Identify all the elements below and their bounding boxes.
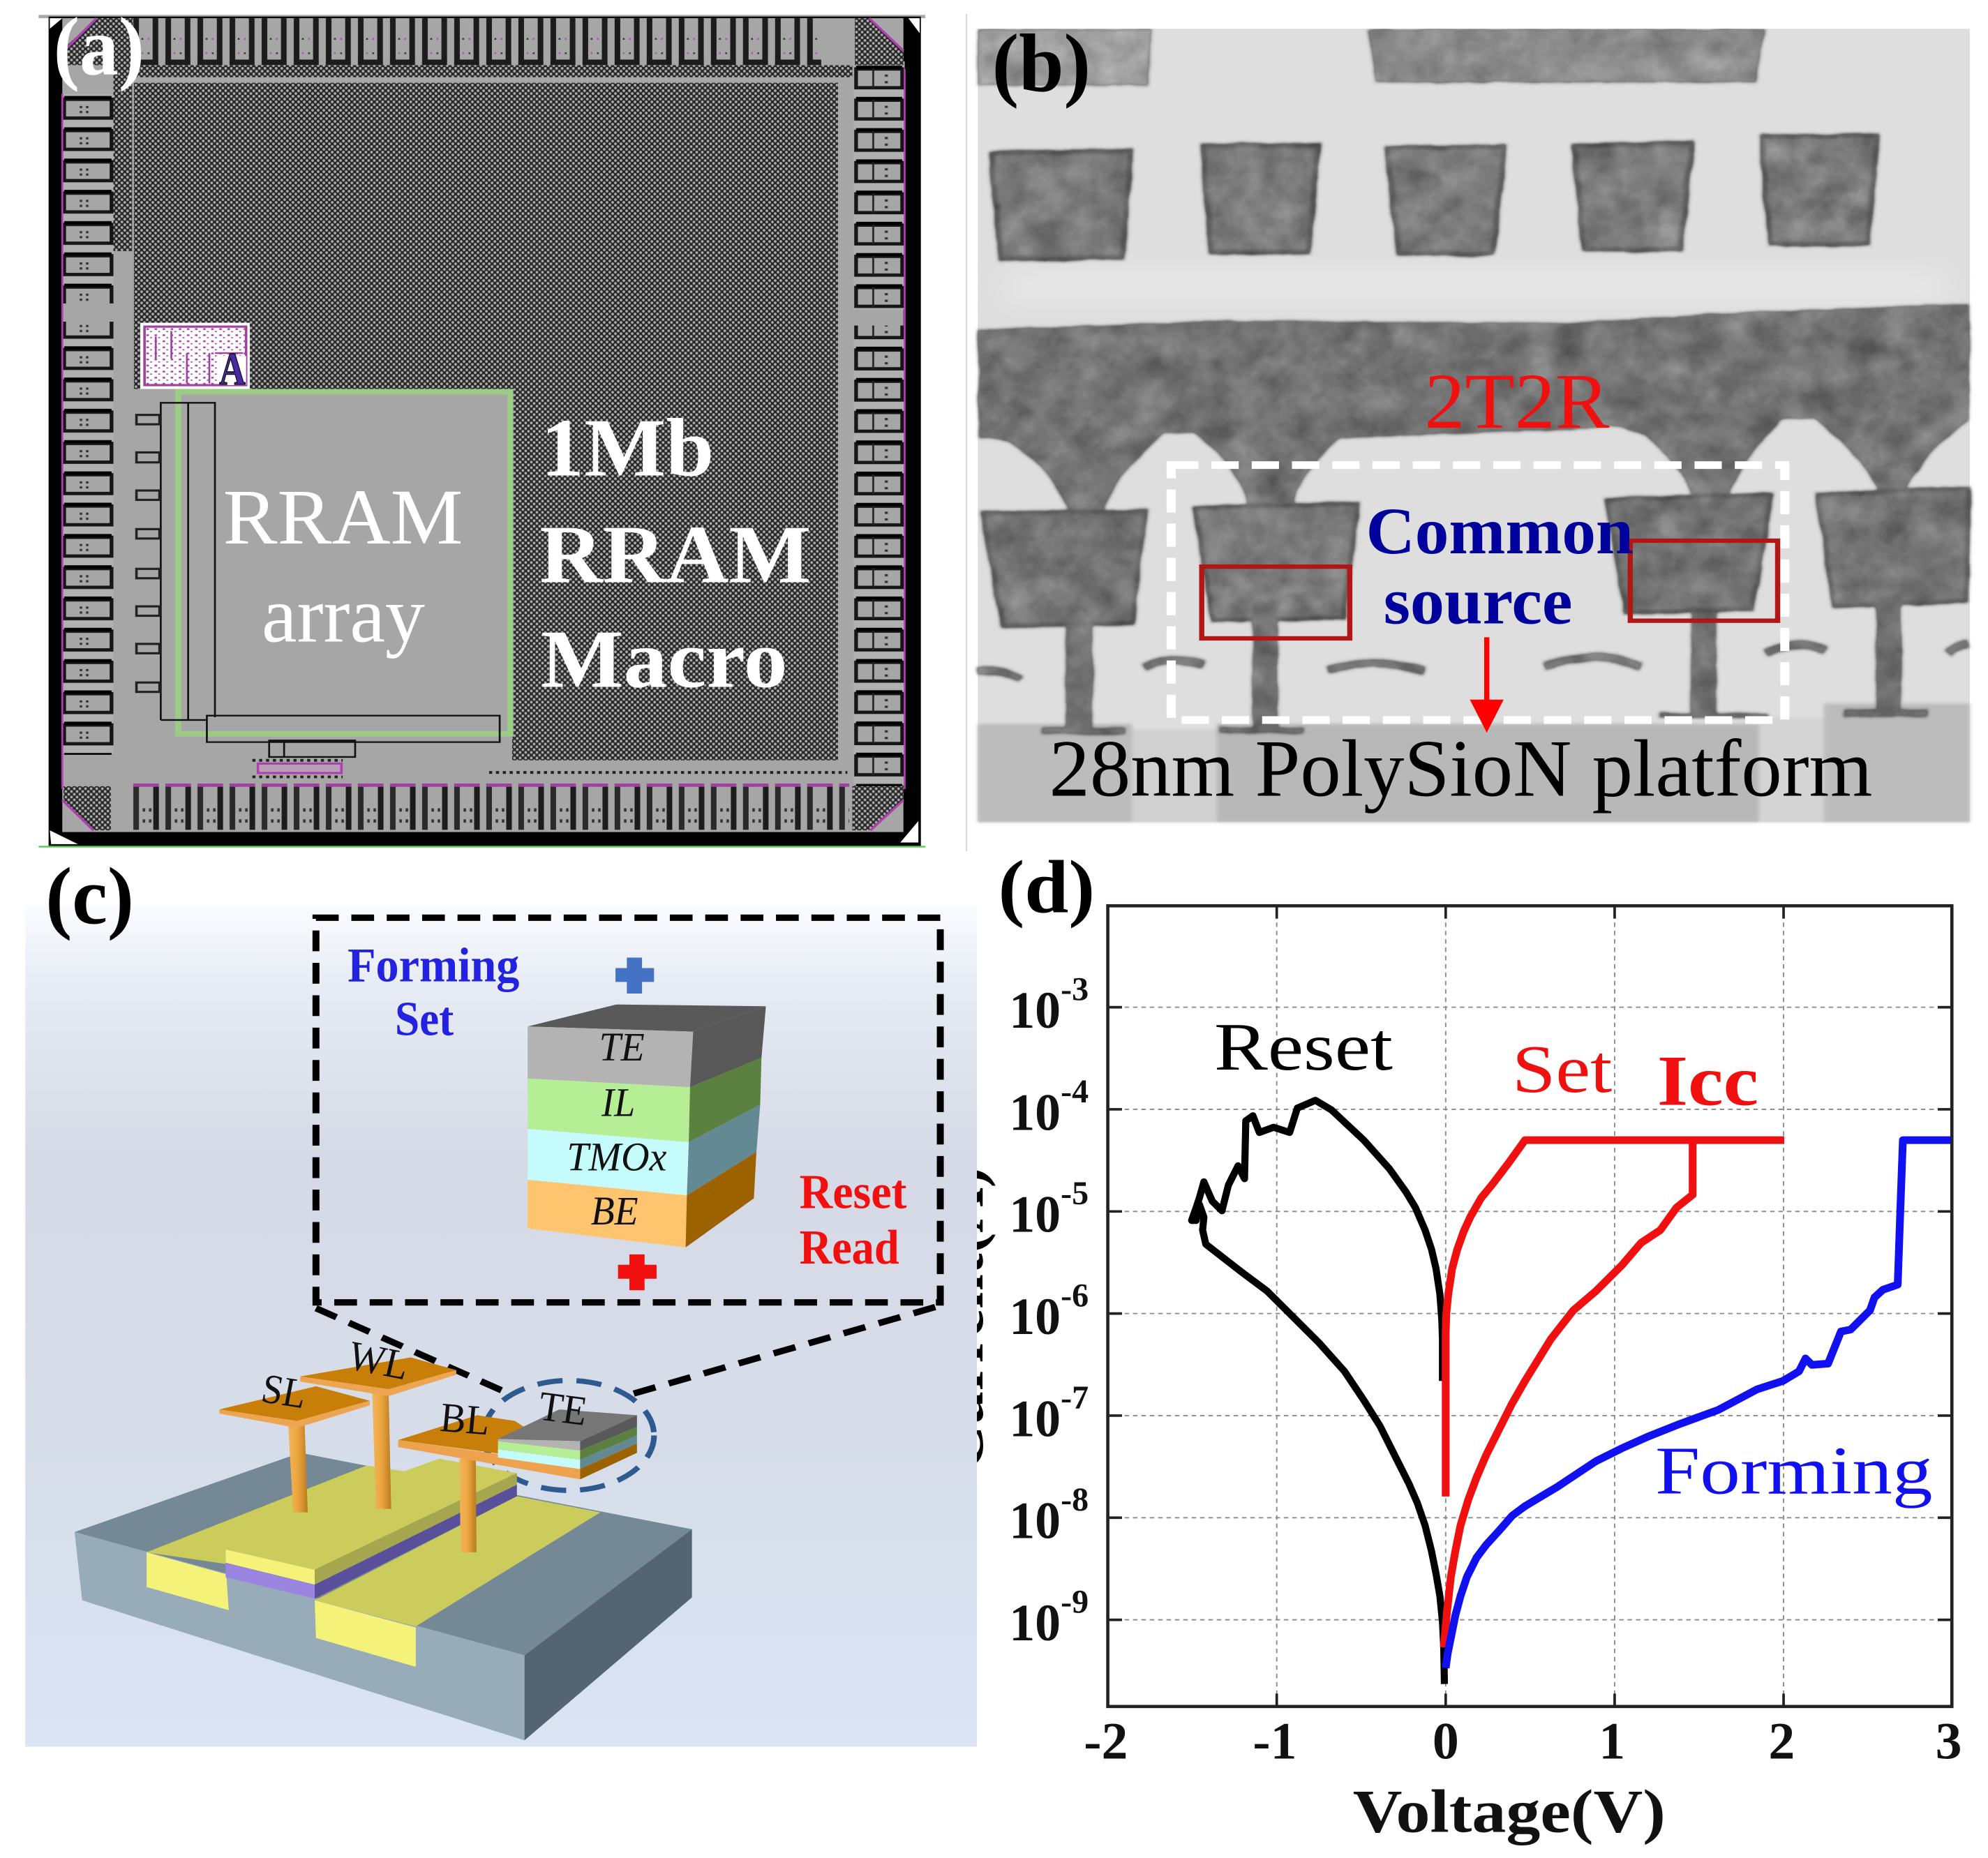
labels: forming set: Forming xyxy=(347,938,519,992)
label: 1Mb RRAM Macro: 1Mb xyxy=(541,403,714,494)
bottom bond pads xyxy=(133,784,849,832)
y tick labels: -4 xyxy=(1061,1073,1089,1110)
y tick labels: 10 xyxy=(1009,982,1061,1040)
logo block: A xyxy=(219,344,246,395)
x tick labels: -2 xyxy=(1084,1713,1128,1770)
label: RRAM array: RRAM xyxy=(223,474,463,561)
right bond pads xyxy=(853,61,904,786)
label: (b): (b) xyxy=(992,18,1091,110)
y tick labels: -7 xyxy=(1061,1379,1089,1416)
label: 1Mb RRAM Macro: RRAM xyxy=(539,509,812,601)
checker fill region xyxy=(114,65,852,761)
logo block xyxy=(140,323,250,395)
red highlight boxes xyxy=(1202,541,1778,638)
x axis title: Voltage(V) xyxy=(1353,1777,1666,1845)
grid xyxy=(1108,906,1952,1707)
RRAM array block xyxy=(134,389,510,757)
line labels: BL xyxy=(438,1393,492,1444)
x tick labels: 0 xyxy=(1433,1713,1459,1770)
dashed zoom box xyxy=(316,917,941,1395)
x tick labels: 3 xyxy=(1936,1713,1962,1770)
labels: reset read: Read xyxy=(800,1220,899,1274)
dashed ellipse xyxy=(484,1381,654,1490)
label: set: Set xyxy=(1512,1032,1612,1107)
x tick labels: 1 xyxy=(1599,1713,1625,1770)
y tick labels: -3 xyxy=(1061,971,1089,1007)
axes frame and ticks xyxy=(1108,906,1952,1707)
label: reset: Reset xyxy=(1214,1010,1393,1085)
RRAM stack: TE xyxy=(599,1026,645,1070)
y tick labels: 10 xyxy=(1009,1492,1061,1550)
y tick labels: -8 xyxy=(1061,1481,1089,1518)
curve: forming xyxy=(1446,1140,1950,1668)
label: (a): (a) xyxy=(54,1,144,93)
label: common source: Common xyxy=(1366,495,1634,568)
panel b: cross-section TEM xyxy=(970,18,1978,822)
line labels: TE xyxy=(536,1382,590,1434)
label: 1Mb RRAM Macro xyxy=(539,403,812,705)
label: common source xyxy=(1366,495,1634,638)
label: RRAM array xyxy=(223,474,463,659)
icon: blue plus xyxy=(615,958,654,994)
curve: reset xyxy=(1192,1100,1444,1684)
label: (d): (d) xyxy=(998,845,1095,929)
y tick labels: 10 xyxy=(1009,1084,1061,1141)
top bond pads xyxy=(133,18,821,65)
labels: forming set xyxy=(347,938,519,1046)
panel a: chip layout xyxy=(38,1,925,848)
label: 2T2R: 2T2R xyxy=(1424,357,1610,445)
label: forming: Forming xyxy=(1655,1433,1933,1508)
curve: set xyxy=(1444,1140,1784,1647)
pink peripheral block xyxy=(253,761,847,777)
substrate band xyxy=(978,703,1970,822)
arrow: common source xyxy=(1470,637,1504,733)
line labels xyxy=(258,1332,590,1444)
y tick labels: 10 xyxy=(1009,1391,1061,1448)
RRAM stack xyxy=(528,1005,766,1248)
decoder cells xyxy=(137,415,160,692)
x tick labels: -1 xyxy=(1253,1713,1296,1770)
labels: forming set: Set xyxy=(395,992,454,1046)
labels: reset read: Reset xyxy=(800,1164,907,1219)
metal plates xyxy=(219,1357,580,1479)
labels: reset read xyxy=(800,1164,907,1274)
source/drain and gate xyxy=(147,1459,600,1667)
metal blocks and vias xyxy=(978,29,1970,735)
white dashed box xyxy=(1171,465,1785,720)
small TE stack xyxy=(498,1409,637,1479)
y tick labels: -5 xyxy=(1061,1175,1089,1212)
label: 1Mb RRAM Macro: Macro xyxy=(541,614,788,705)
panel d: I-V chart xyxy=(929,845,1962,1845)
label: common source: source xyxy=(1384,565,1573,638)
RRAM stack: BE xyxy=(591,1189,638,1234)
left bond pads xyxy=(62,93,114,755)
label: RRAM array: array xyxy=(262,572,425,659)
line labels: SL xyxy=(258,1365,311,1418)
x tick labels: 2 xyxy=(1768,1713,1795,1770)
pillars xyxy=(288,1392,477,1552)
substrate slab xyxy=(75,1453,692,1740)
y tick labels xyxy=(1009,971,1089,1652)
y tick labels: -9 xyxy=(1061,1584,1089,1620)
y tick labels: 10 xyxy=(1009,1288,1061,1346)
line labels: WL xyxy=(344,1332,414,1389)
icon: red plus xyxy=(618,1254,657,1290)
RRAM stack: TMOx xyxy=(567,1135,666,1180)
x tick labels xyxy=(1084,1713,1962,1770)
label: Icc: Icc xyxy=(1657,1042,1758,1121)
y tick labels: 10 xyxy=(1009,1186,1061,1244)
y axis title (clipped): Current(A) xyxy=(929,1167,996,1471)
RRAM stack: IL xyxy=(601,1081,635,1125)
y tick labels: 10 xyxy=(1009,1594,1061,1652)
panel c: device schematic xyxy=(0,851,977,1777)
label: (c): (c) xyxy=(45,852,134,941)
corner cells xyxy=(50,18,920,844)
y tick labels: -6 xyxy=(1061,1278,1089,1314)
